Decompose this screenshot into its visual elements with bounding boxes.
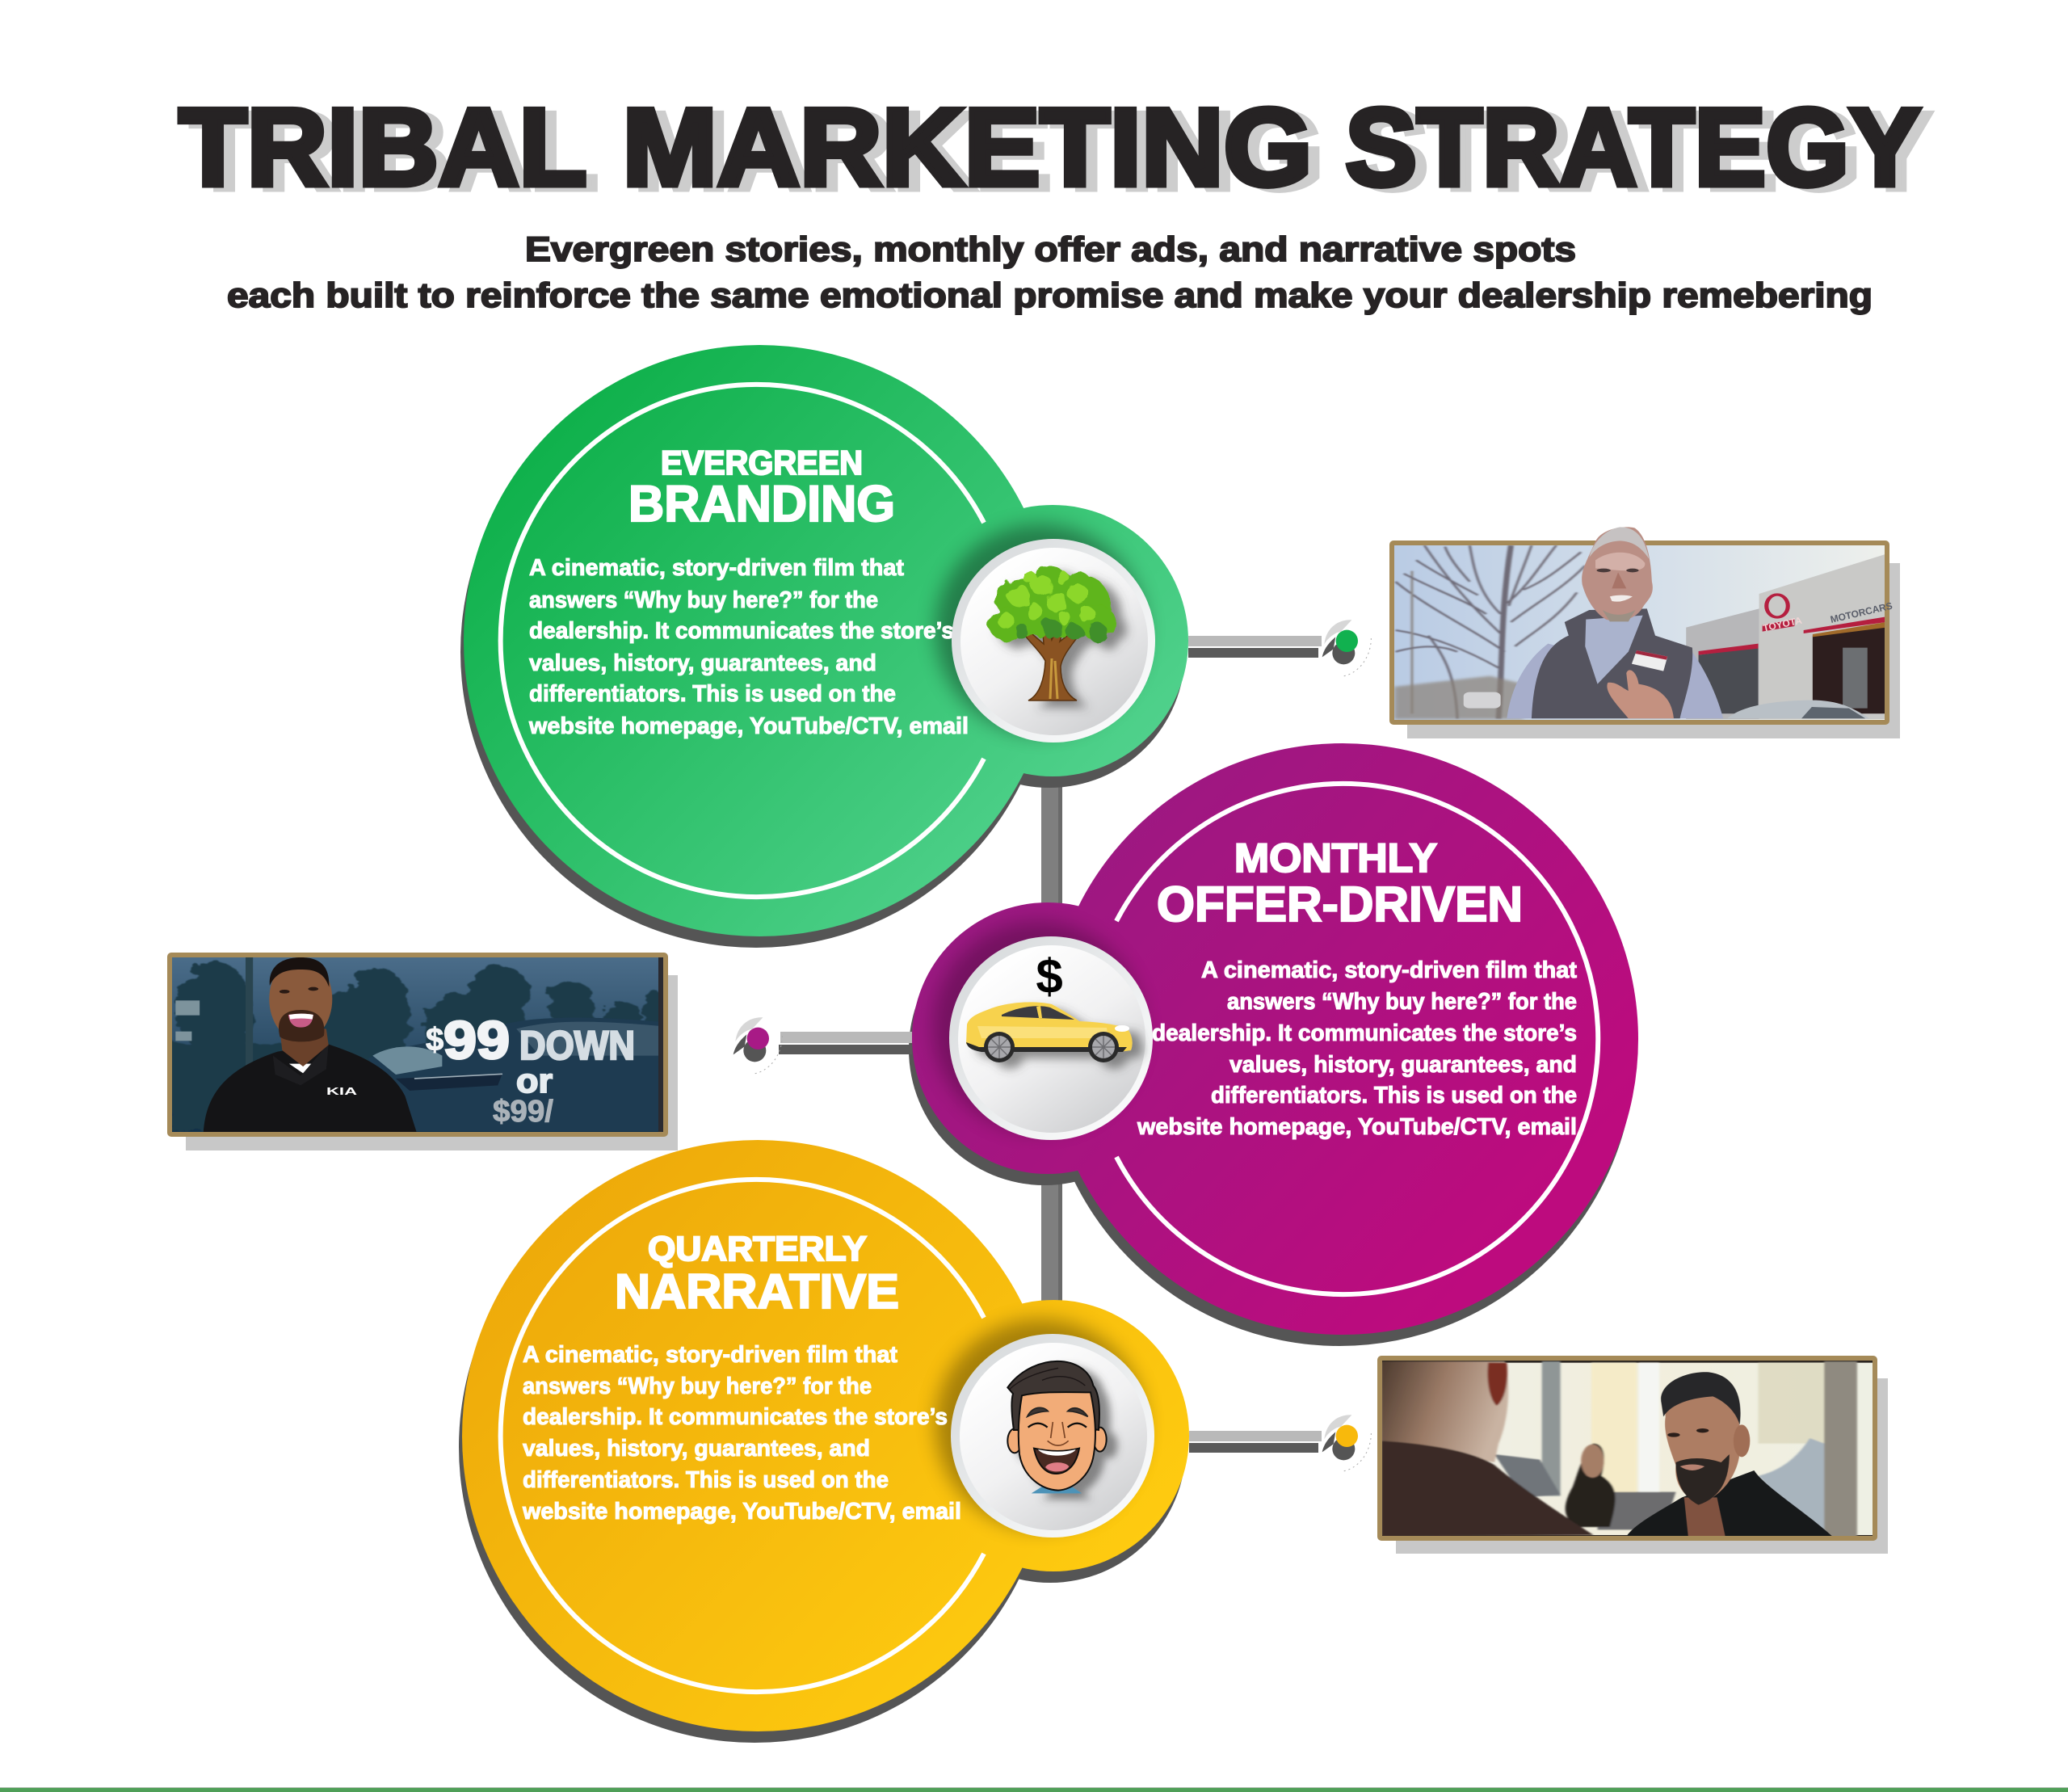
heading: quarterly narrative: QUARTERLY	[648, 1230, 867, 1268]
photo 1 signage	[1762, 600, 1894, 634]
heading: evergreen branding	[628, 444, 895, 532]
node shade: green	[935, 524, 1145, 734]
vertical connector: green to purple	[1041, 768, 1062, 921]
icon disc: purple	[949, 936, 1153, 1140]
icon disc: green	[952, 539, 1155, 742]
heading: monthly offer-driven: OFFER-DRIVEN	[1157, 877, 1523, 932]
vertical connector: purple to yellow	[1041, 1163, 1062, 1317]
panel: monthly offer-driven	[909, 743, 1638, 1346]
photo: two men in showroom	[1377, 1356, 1888, 1554]
circle shadow: green	[460, 356, 1185, 948]
connector: purple to photo	[733, 1017, 912, 1074]
circle body: purple	[912, 743, 1638, 1335]
body text: green: A cinematic, story-driven film that	[529, 555, 904, 581]
connector: yellow to photo	[1189, 1415, 1371, 1471]
ad text: KIA	[326, 1085, 358, 1097]
body text: green: values, history, guarantees, and	[529, 650, 876, 676]
circle shadow: yellow	[459, 1151, 1186, 1743]
subtitle: Evergreen stories, monthly offer ads, and narrative spots	[525, 230, 1576, 269]
heading: monthly offer-driven	[1157, 835, 1523, 932]
circle shadow: purple	[909, 755, 1635, 1346]
heading: quarterly narrative: NARRATIVE	[615, 1264, 899, 1319]
icon: dollar sign: $	[1036, 949, 1063, 1003]
title: TRIBAL	[179, 86, 586, 208]
body text: purple: A cinematic, story-driven film that	[1201, 957, 1577, 983]
panel: evergreen branding	[460, 345, 1188, 948]
ad text: 99	[443, 1010, 510, 1070]
body text: purple	[1137, 957, 1577, 1140]
white ring: yellow	[501, 1180, 984, 1692]
body text: green: differentiators. This is used on the	[529, 681, 896, 707]
body text: yellow: A cinematic, story-driven film that	[523, 1342, 897, 1368]
body text: purple: dealership. It communicates the store’s	[1152, 1020, 1577, 1046]
ad text: or	[516, 1062, 553, 1100]
circle body: green	[464, 345, 1188, 936]
icon: tree	[989, 566, 1115, 700]
icon: yellow car	[966, 1002, 1133, 1062]
heading: evergreen branding: BRANDING	[628, 476, 895, 532]
ad text: DOWN	[519, 1023, 635, 1068]
marker: purple	[733, 1017, 782, 1074]
marker: green	[1322, 620, 1371, 676]
title: MARKETING	[633, 90, 1323, 212]
body text: yellow: website homepage, YouTube/CTV, email	[522, 1499, 961, 1525]
circle body: yellow	[462, 1140, 1189, 1731]
body text: yellow: values, history, guarantees, and	[523, 1436, 870, 1462]
body text: green	[528, 555, 969, 739]
title	[179, 86, 1932, 212]
person head: photo 1	[1582, 527, 1653, 621]
body text: yellow: dealership. It communicates the store’s	[523, 1404, 948, 1430]
body text: yellow: differentiators. This is used on the	[523, 1467, 889, 1493]
panel: quarterly narrative	[459, 1140, 1189, 1743]
ad text: $99/	[493, 1095, 553, 1129]
bottom green bar	[0, 1787, 2068, 1792]
title: STRATEGY	[1357, 90, 1932, 212]
icon: laughing face	[1007, 1361, 1107, 1493]
title: STRATEGY	[1346, 86, 1921, 208]
subtitle	[227, 230, 1873, 315]
title: MARKETING	[622, 86, 1312, 208]
photo: dealer at Toyota store	[1389, 527, 1900, 738]
photo 1 signage: MOTORCARS	[1829, 600, 1894, 625]
body text: purple: answers “Why buy here?” for the	[1227, 989, 1577, 1015]
connector: green to photo	[1188, 620, 1371, 676]
photo: Kia offer ad	[167, 953, 678, 1150]
node shade: purple	[933, 922, 1143, 1132]
node shade: yellow	[935, 1319, 1145, 1529]
body text: purple: values, history, guarantees, and	[1229, 1052, 1577, 1078]
body text: green: answers “Why buy here?” for the	[529, 587, 878, 613]
heading: quarterly narrative	[615, 1230, 899, 1319]
white ring: purple	[1116, 784, 1598, 1294]
title: TRIBAL	[191, 90, 598, 212]
white ring: green	[501, 385, 984, 897]
body text: green: website homepage, YouTube/CTV, email	[528, 713, 969, 739]
subtitle: each built to reinforce the same emotional promise and make your dealership remebering	[227, 276, 1873, 315]
ad text: $	[426, 1022, 443, 1058]
photo 1 signage: TOYOTA	[1762, 615, 1803, 634]
body text: purple: website homepage, YouTube/CTV, email	[1137, 1114, 1577, 1140]
body text: yellow	[522, 1342, 961, 1525]
heading: evergreen branding: EVERGREEN	[661, 444, 863, 482]
ad text	[326, 1010, 635, 1129]
icon disc: yellow	[951, 1334, 1154, 1538]
marker: yellow	[1322, 1415, 1371, 1471]
body text: green: dealership. It communicates the store’s	[529, 618, 954, 644]
heading: monthly offer-driven: MONTHLY	[1234, 835, 1437, 881]
body text: purple: differentiators. This is used on the	[1211, 1083, 1577, 1108]
body text: yellow: answers “Why buy here?” for the	[523, 1373, 872, 1399]
